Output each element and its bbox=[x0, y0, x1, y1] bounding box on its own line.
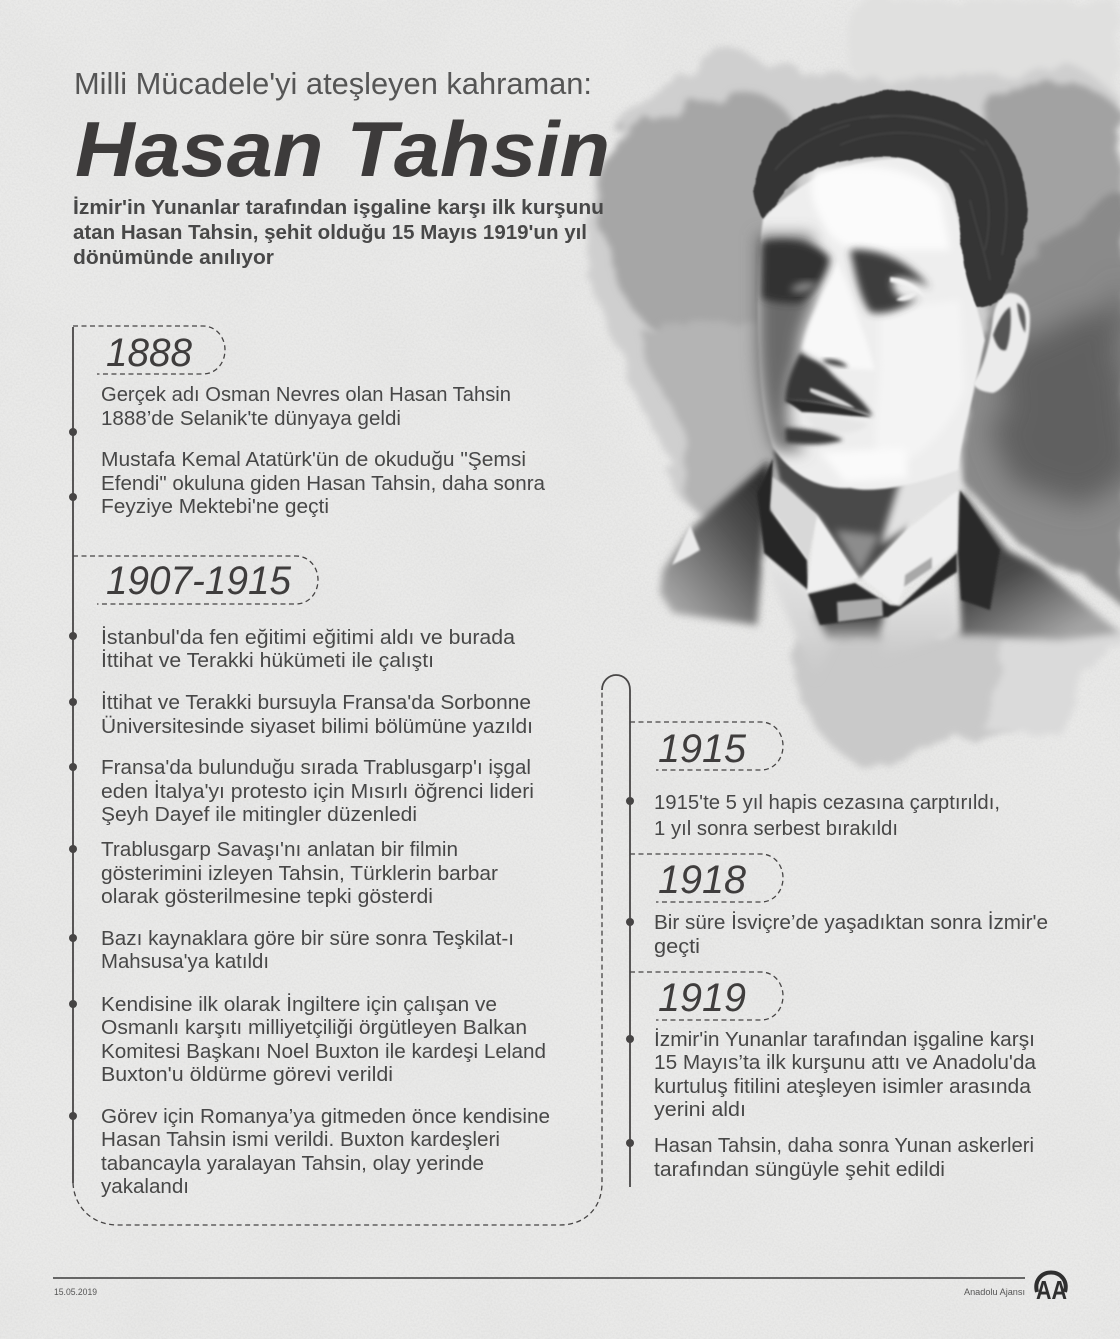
entry: first shot: yerini aldı bbox=[654, 1099, 746, 1121]
ear bbox=[973, 293, 1030, 393]
entry: protests: Fransa'da bulunduğu sırada Trablusgarp'ı işgal bbox=[101, 757, 531, 779]
entry: Switzerland bbox=[626, 911, 1048, 958]
stain fleck on the left shoulder bbox=[672, 525, 700, 565]
neck bbox=[773, 435, 961, 578]
shirt front bbox=[762, 557, 958, 680]
hair bbox=[754, 90, 1028, 307]
year tab 1915 bbox=[630, 722, 783, 771]
entry: Switzerland: Bir süre İsviçre’de yaşadıktan sonra İzmir'e bbox=[654, 911, 1048, 934]
jacket right bbox=[960, 490, 1120, 640]
entry: protests: eden İtalya'yı protesto için Mısırlı öğrenci lideri bbox=[101, 780, 534, 803]
entry: martyrdom: tarafından süngüyle şehit edildi bbox=[654, 1159, 945, 1181]
entry: Teskilat-i Mahsusa: Mahsusa'ya katıldı bbox=[101, 951, 269, 973]
panel: 1919 bbox=[626, 972, 1037, 1181]
face bbox=[758, 158, 985, 490]
entry: first shot: 15 Mayıs’ta ilk kurşunu attı ve Anadolu'da bbox=[654, 1052, 1037, 1074]
hair highlights bbox=[775, 116, 1007, 280]
entry: Romania: Hasan Tahsin ismi verildi. Buxton kardeşleri bbox=[101, 1129, 500, 1151]
entry: Romania: tabancayla yaralayan Tahsin, olay yerinde bbox=[101, 1153, 484, 1175]
entry: sentence: 1 yıl sonra serbest bırakıldı bbox=[654, 818, 898, 840]
entry: Romania: Görev için Romanya’ya gitmeden önce kendisine bbox=[101, 1106, 550, 1128]
entry: film: olarak gösterilmesine tepki gösterdi bbox=[101, 886, 433, 908]
panel: 1888 bbox=[69, 326, 546, 518]
entry: first shot bbox=[626, 1028, 1037, 1121]
year tab 1915: 1915 bbox=[658, 727, 747, 771]
right eye and brow bbox=[850, 250, 930, 313]
year tab 1907-1915: 1907-1915 bbox=[106, 559, 292, 603]
entry: assignment: Buxton'u öldürme görevi verildi bbox=[101, 1064, 393, 1086]
entry: martyrdom: Hasan Tahsin, daha sonra Yunan askerleri bbox=[654, 1135, 1034, 1157]
panel: 1918 bbox=[626, 854, 1048, 958]
entry: assignment: Osmanlı karşıtı milliyetçiliği örgütleyen Balkan bbox=[101, 1017, 527, 1039]
entry: assignment: Komitesi Başkanı Noel Buxton ile kardeşi Leland bbox=[101, 1041, 546, 1063]
entry: birth: Gerçek adı Osman Nevres olan Hasan Tahsin bbox=[101, 384, 511, 406]
panel: 1907-1915 bbox=[69, 556, 550, 1198]
left eye and brow bbox=[762, 240, 830, 303]
necktie shadow bbox=[815, 612, 884, 640]
moustache and mouth bbox=[785, 353, 873, 444]
footer bbox=[53, 1272, 1067, 1305]
entry: film: gösterimini izleyen Tahsin, Türklerin barbar bbox=[101, 863, 498, 885]
icon: Anadolu Agency logo: AA bbox=[1036, 1275, 1067, 1305]
kicker: Milli Mücadele'yi ateşleyen kahraman: bbox=[74, 66, 592, 101]
timeline connector lines bbox=[73, 327, 630, 1225]
entry: first shot: İzmir'in Yunanlar tarafından işgaline karşı bbox=[654, 1028, 1035, 1051]
entry: school: Efendi" okuluna giden Hasan Tahsin, daha sonra bbox=[101, 473, 546, 495]
date: 15.05.2019 bbox=[54, 1287, 97, 1297]
entry: Teskilat-i Mahsusa: Bazı kaynaklara göre bir süre sonra Teşkilat-ı bbox=[101, 928, 514, 950]
entry: Teskilat-i Mahsusa bbox=[69, 928, 514, 973]
year tab 1888 bbox=[73, 326, 225, 375]
entry: sentence bbox=[626, 792, 1000, 840]
entry: Romania bbox=[69, 1106, 550, 1198]
entry: sentence: 1915'te 5 yıl hapis cezasına çarptırıldı, bbox=[654, 792, 1000, 814]
entry: Sorbonne: Üniversitesinde siyaset bilimi bölümüne yazıldı bbox=[101, 716, 533, 738]
year tab 1919: 1919 bbox=[658, 976, 746, 1020]
subtitle: dönümünde anılıyor bbox=[73, 246, 274, 269]
entry: assignment: Kendisine ilk olarak İngiltere için çalışan ve bbox=[101, 993, 497, 1016]
credit: Anadolu Ajansı bbox=[964, 1287, 1025, 1297]
lapel bbox=[757, 458, 1000, 610]
entry: Istanbul: İttihat ve Terakki hükümeti ile çalıştı bbox=[101, 649, 434, 672]
entry: protests bbox=[69, 757, 534, 826]
year tab 1918 bbox=[630, 854, 783, 902]
year tab 1888: 1888 bbox=[106, 331, 193, 375]
jacket left bbox=[660, 460, 770, 625]
watercolor stain bbox=[586, 0, 1120, 772]
entry: birth bbox=[69, 384, 511, 436]
year tab 1918: 1918 bbox=[658, 858, 747, 902]
title block bbox=[73, 66, 610, 269]
necktie and collar band bbox=[808, 553, 957, 625]
entry: school bbox=[69, 449, 546, 518]
entry: Sorbonne: İttihat ve Terakki bursuyla Fransa'da Sorbonne bbox=[101, 691, 531, 714]
face shading bbox=[757, 166, 965, 482]
entry: birth: 1888’de Selanik'te dünyaya geldi bbox=[101, 408, 401, 430]
subtitle bbox=[73, 196, 604, 269]
panel: 1915 bbox=[626, 722, 1000, 840]
portrait of Hasan Tahsin over watercolor stain bbox=[586, 0, 1120, 772]
entry: protests: Şeyh Dayef ile mitingler düzenledi bbox=[101, 804, 417, 826]
main heading: Hasan Tahsin bbox=[75, 105, 610, 193]
year tab 1919 bbox=[630, 972, 783, 1020]
subtitle: İzmir'in Yunanlar tarafından işgaline karşı ilk kurşunu bbox=[73, 196, 604, 219]
entry: martyrdom bbox=[626, 1135, 1034, 1181]
entry: Romania: yakalandı bbox=[101, 1176, 189, 1198]
entry: Istanbul bbox=[69, 626, 516, 672]
entry: film bbox=[69, 839, 498, 908]
entry: first shot: kurtuluş fitilini ateşleyen isimler arasında bbox=[654, 1076, 1032, 1098]
entry: school: Mustafa Kemal Atatürk'ün de okuduğu "Şemsi bbox=[101, 449, 526, 471]
collar bbox=[771, 477, 958, 605]
entry: Istanbul: İstanbul'da fen eğitimi eğitimi aldı ve burada bbox=[101, 626, 516, 649]
entry: Switzerland: geçti bbox=[654, 936, 700, 958]
entry: film: Trablusgarp Savaşı'nı anlatan bir filmin bbox=[101, 839, 458, 861]
entry: assignment bbox=[69, 993, 546, 1086]
entry: Sorbonne bbox=[69, 691, 533, 738]
subtitle: atan Hasan Tahsin, şehit olduğu 15 Mayıs 1919'un yıl bbox=[73, 221, 587, 244]
entry: school: Feyziye Mektebi'ne geçti bbox=[101, 496, 329, 518]
